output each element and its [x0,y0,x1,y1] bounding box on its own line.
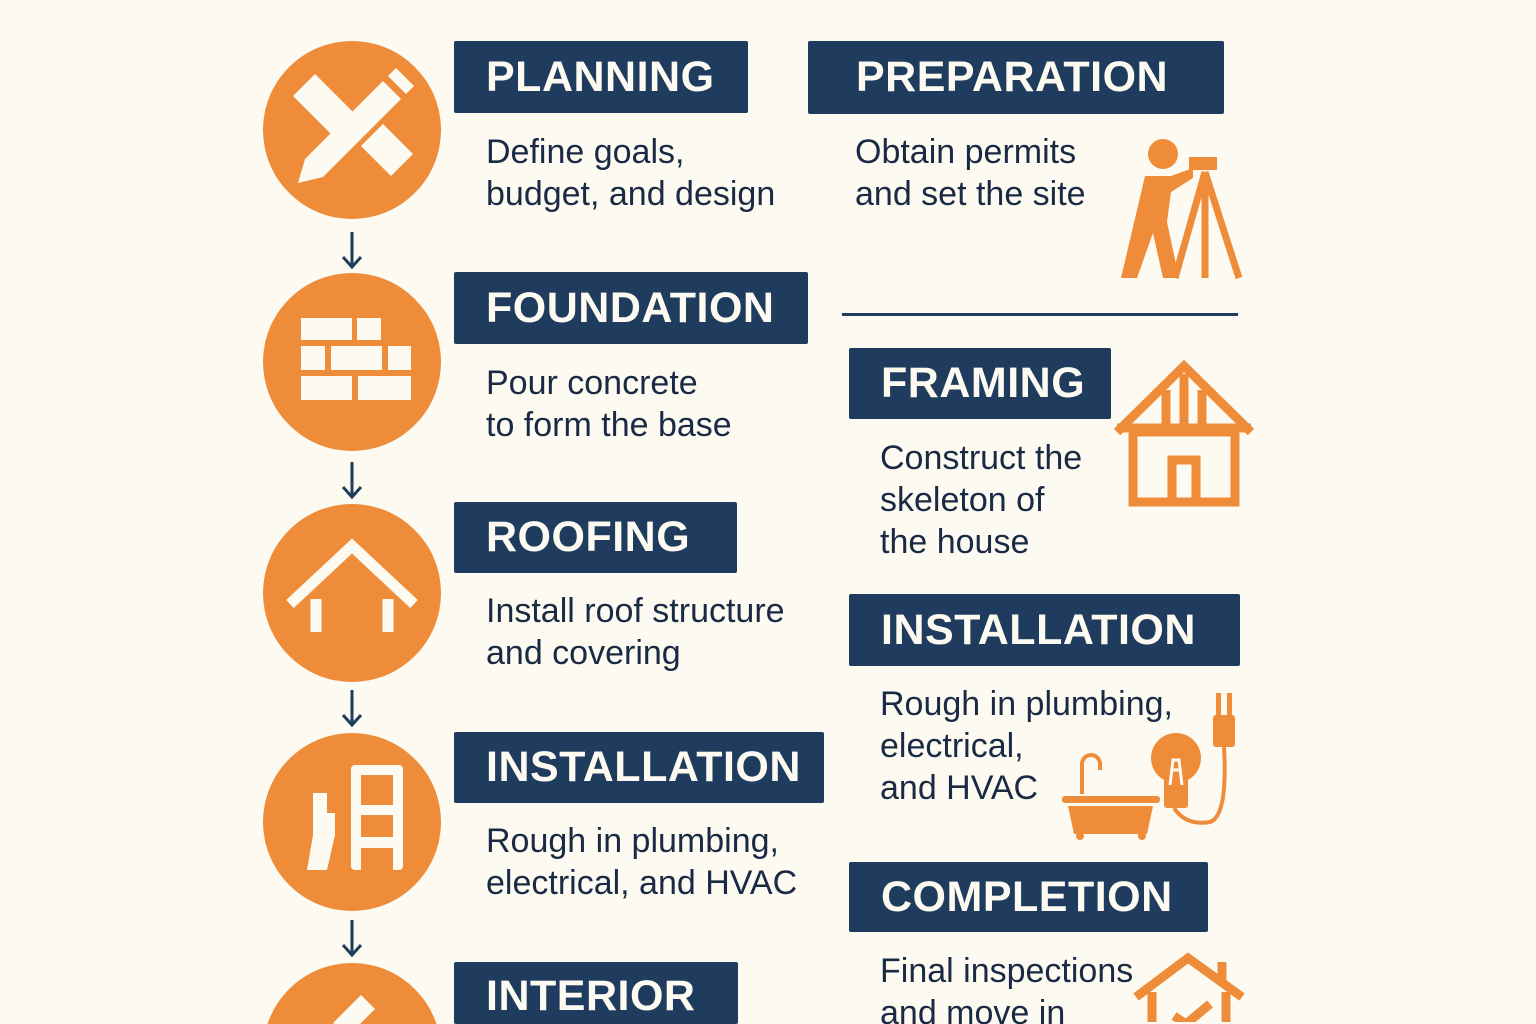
arrow 2 [342,462,362,500]
label: planning: PLANNING [486,52,715,100]
text: installation right: and HVAC [880,769,1038,807]
label: installation right [849,594,1240,666]
icon: roofing circle [263,504,441,682]
text: installation left [486,822,797,902]
text: framing [880,439,1082,561]
arrow 4 [342,920,362,958]
text: planning: budget, and design [486,175,775,213]
text: foundation: to form the base [486,406,732,444]
text: completion [880,952,1133,1024]
arrow 3 [342,690,362,728]
label: installation left: INSTALLATION [486,743,801,791]
text: completion: Final inspections [880,952,1133,990]
text: foundation [486,364,732,444]
label: completion: COMPLETION [881,872,1173,920]
label: completion [849,862,1208,932]
label: installation right: INSTALLATION [881,606,1196,654]
text: installation right: electrical, [880,727,1024,765]
text: planning [486,133,775,213]
label: roofing [454,502,737,573]
label: roofing: ROOFING [486,513,690,561]
icon: surveyor [1121,139,1242,280]
label: installation left [454,732,824,803]
icon: bathtub, bulb, plug [1062,693,1235,840]
icon: house check [1133,952,1245,1022]
text: preparation: Obtain permits [855,133,1076,171]
text: planning: Define goals, [486,133,684,171]
icon: foundation circle [263,273,441,451]
text: roofing: Install roof structure [486,592,785,630]
label: foundation [454,272,808,344]
icon: planning circle [263,41,441,219]
divider [842,313,1238,316]
text: framing: Construct the [880,439,1082,477]
text: foundation: Pour concrete [486,364,698,402]
icon: interior circle [268,963,436,1024]
label: planning [454,41,748,113]
label: framing [849,348,1111,419]
label: framing: FRAMING [881,359,1085,407]
label: preparation [808,41,1224,114]
text: roofing [486,592,785,672]
text: installation left: Rough in plumbing, [486,822,779,860]
text: installation right [880,685,1173,807]
label: preparation: PREPARATION [856,53,1168,101]
text: installation left: electrical, and HVAC [486,864,797,902]
label: interior: INTERIOR [486,972,695,1020]
label: foundation: FOUNDATION [486,284,774,332]
text: preparation: and set the site [855,175,1086,213]
label: interior [454,962,738,1024]
text: framing: skeleton of [880,481,1044,519]
text: installation right: Rough in plumbing, [880,685,1173,723]
text: preparation [855,133,1086,213]
text: roofing: and covering [486,634,681,672]
icon: installation circle [263,733,441,911]
arrow 1 [342,232,362,270]
icon: house frame [1114,360,1254,506]
text: framing: the house [880,523,1029,561]
